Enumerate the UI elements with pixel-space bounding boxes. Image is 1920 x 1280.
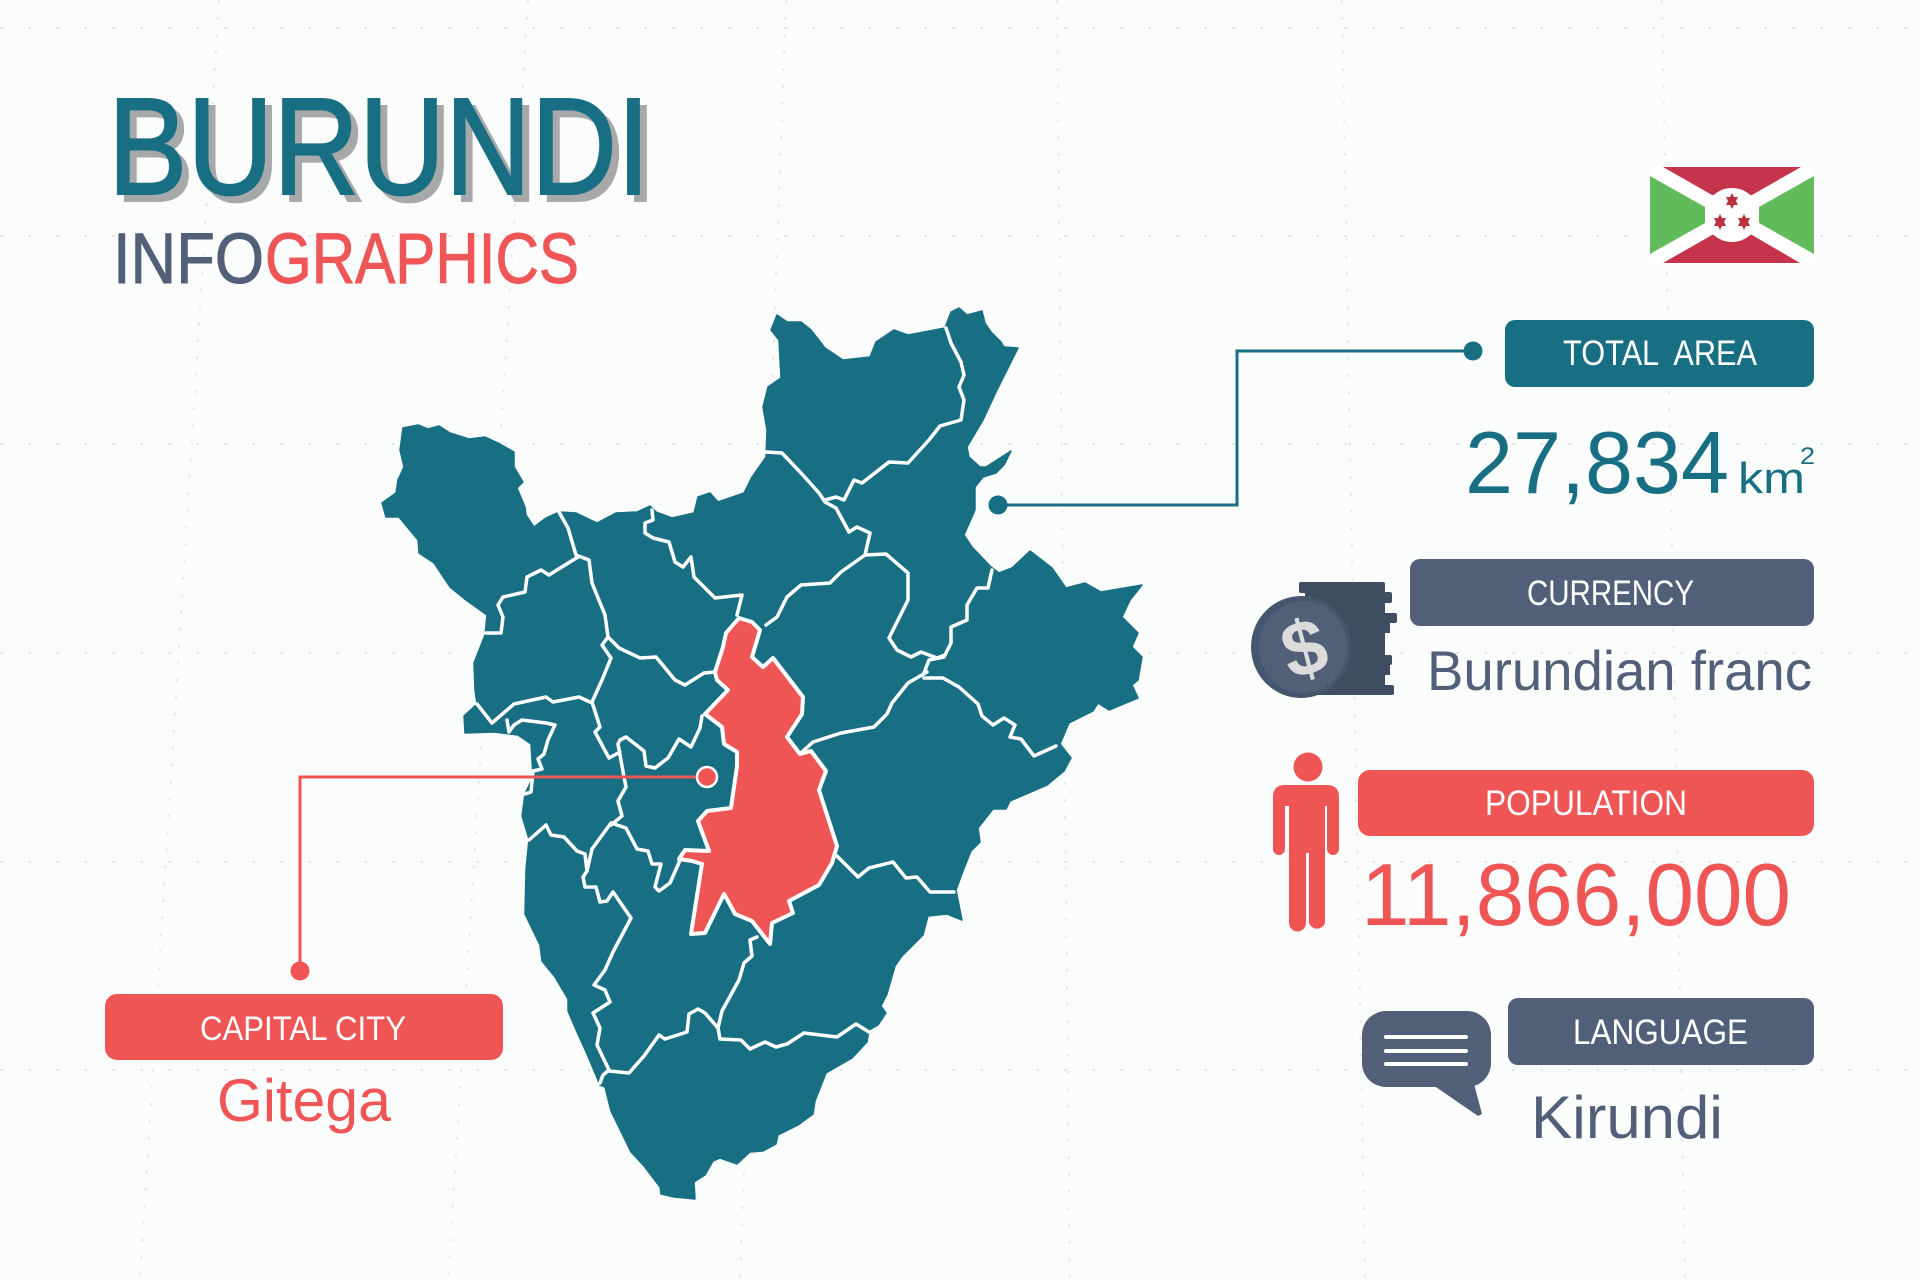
currency label [1410, 559, 1814, 626]
language label: LANGUAGE [1573, 1013, 1748, 1052]
icon: coins: $ [1272, 600, 1337, 696]
subtitle: INFOGRAPHICS: INFO [113, 220, 264, 299]
total area value: 2 [1800, 443, 1815, 470]
title: BURUNDI: BURUNDI [115, 77, 657, 231]
total area value: km [1738, 454, 1805, 503]
capital city value: Gitega [217, 1067, 392, 1134]
currency value: Burundian franc [1427, 639, 1812, 702]
total area label [1505, 320, 1814, 387]
currency label: CURRENCY [1527, 574, 1694, 613]
language value: Kirundi [1531, 1084, 1723, 1151]
icon: speech bubble [1362, 1011, 1491, 1116]
panel: capital city [105, 994, 503, 1134]
panel: population [1273, 752, 1814, 944]
capital city label [105, 994, 503, 1060]
map of Burundi [382, 308, 1142, 1199]
language label [1508, 998, 1814, 1065]
population label: POPULATION [1485, 784, 1687, 823]
icon: person [1273, 752, 1339, 932]
population label [1358, 770, 1814, 836]
capital city label: CAPITAL CITY [200, 1010, 406, 1048]
highlighted province: Gitega [679, 618, 837, 944]
icon: Burundi flag [1650, 167, 1814, 263]
panel: language [1362, 998, 1814, 1151]
connector: capital city [290, 767, 717, 980]
title: BURUNDI: BURUNDI [108, 70, 650, 224]
subtitle: INFOGRAPHICS: GRAPHICS [265, 220, 579, 299]
population value: 11,866,000 [1361, 845, 1791, 944]
panel: total area [1465, 320, 1815, 512]
connector: total area [988, 342, 1482, 514]
total area label: TOTAL AREA [1563, 334, 1758, 373]
map outline [382, 308, 1142, 1199]
panel: currency [1251, 559, 1814, 702]
icon: coins [1251, 582, 1397, 698]
province borders [477, 328, 1056, 1083]
total area value: 27,834 [1465, 413, 1729, 512]
subtitle: INFOGRAPHICS [113, 220, 579, 299]
